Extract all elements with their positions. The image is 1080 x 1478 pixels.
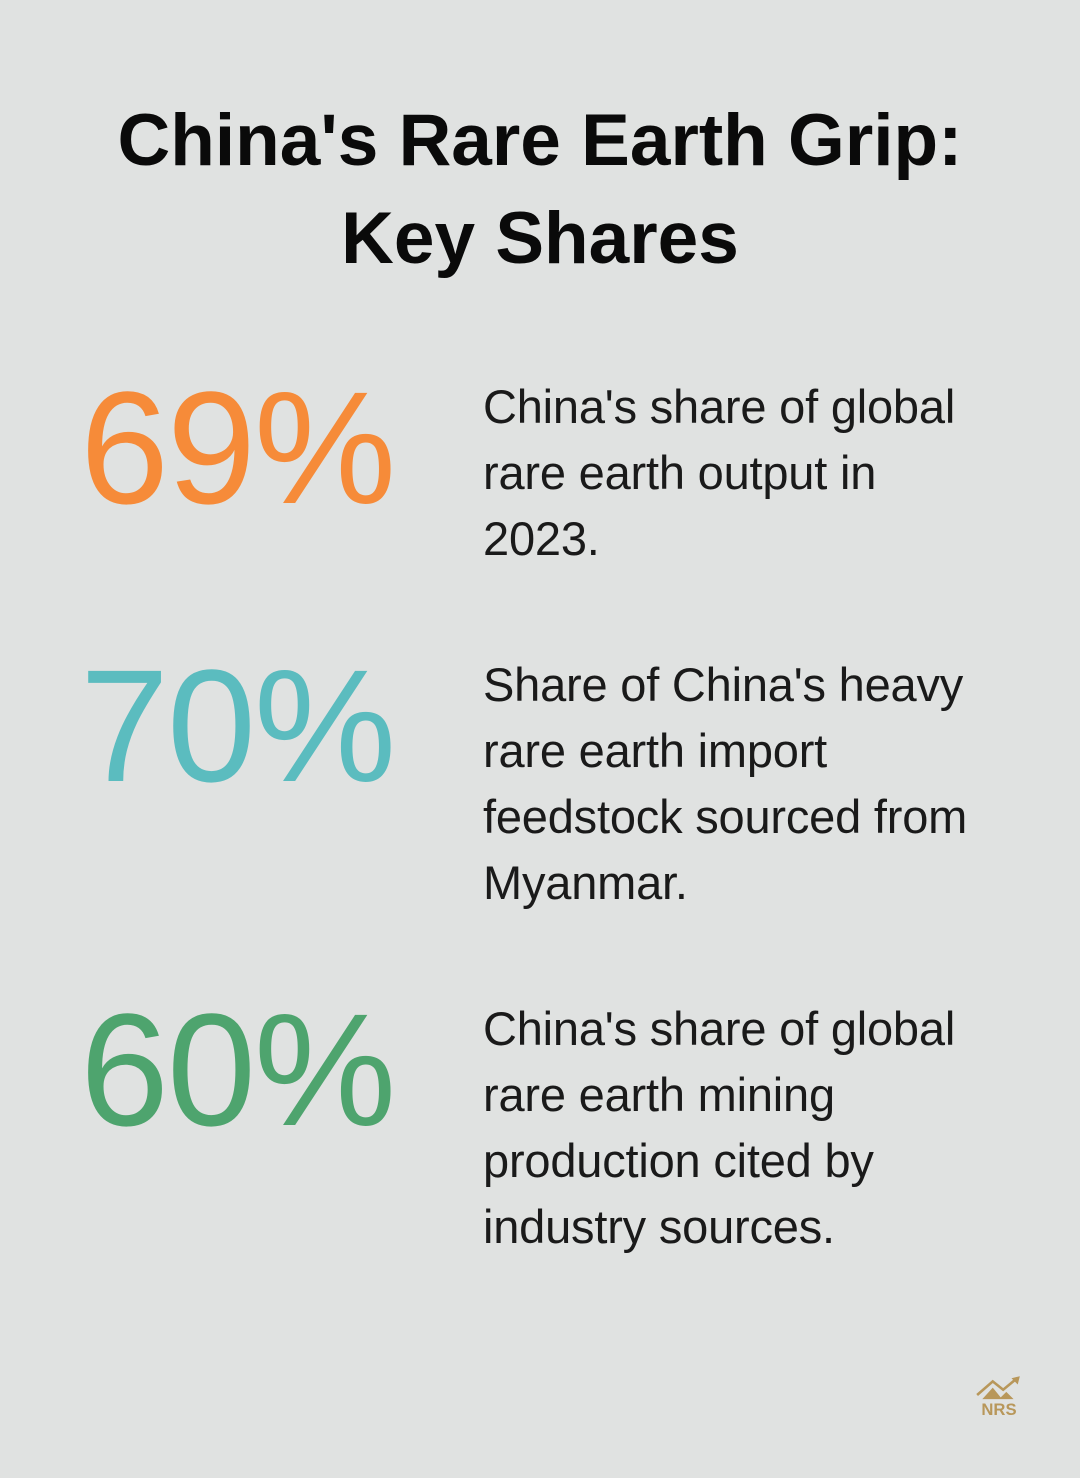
title: [118, 100, 962, 279]
stat 3 text: China's share of global: [483, 1002, 955, 1055]
stat 2 text: feedstock sourced from: [483, 790, 967, 843]
stat 3 text: production cited by: [483, 1134, 874, 1187]
stat 2 text: rare earth import: [483, 724, 827, 777]
title: Key Shares: [341, 198, 739, 279]
stat 1 text: 2023.: [483, 512, 600, 565]
stat 1 number: 69%: [80, 358, 394, 537]
stat 2 text: Share of China's heavy: [483, 658, 963, 711]
stat 2 text: [483, 658, 967, 909]
stat 1 text: rare earth output in: [483, 446, 876, 499]
stat 3 text: rare earth mining: [483, 1068, 835, 1121]
stat 3 number: 60%: [80, 980, 394, 1159]
stat 3 text: industry sources.: [483, 1200, 835, 1253]
stat 2 number: 70%: [80, 636, 394, 815]
stat 2 text: Myanmar.: [483, 856, 688, 909]
stat 1 text: [483, 380, 955, 565]
logo: NRS: [976, 1376, 1020, 1418]
stat 3 text: [483, 1002, 955, 1253]
stat 1 text: China's share of global: [483, 380, 955, 433]
title: China's Rare Earth Grip:: [118, 100, 962, 181]
